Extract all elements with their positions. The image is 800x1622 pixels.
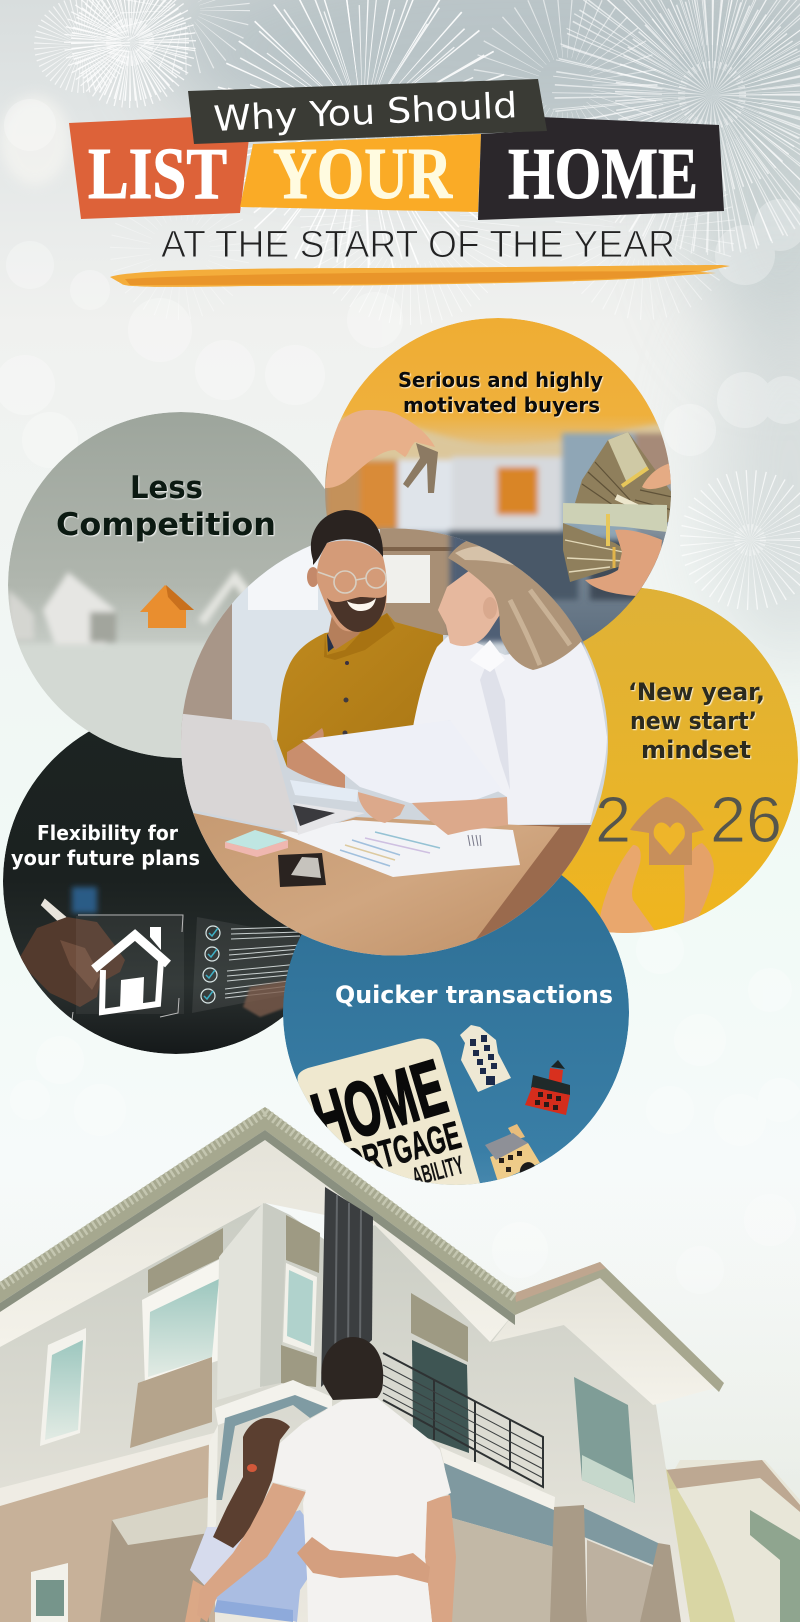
couple bbox=[185, 1337, 456, 1622]
text: serious buyers bbox=[398, 368, 603, 417]
panel: new year new start mindset bbox=[562, 588, 798, 933]
narrow window and siding bbox=[281, 1215, 320, 1387]
word: list: LIST bbox=[88, 133, 227, 214]
legs under table bbox=[470, 825, 592, 942]
woman from behind bbox=[185, 1418, 317, 1622]
text: new year: new start’ bbox=[630, 707, 757, 735]
left windows and siding bbox=[31, 1228, 223, 1622]
porch trim under balcony corner bbox=[207, 1380, 332, 1545]
dark pillar bbox=[321, 1187, 373, 1387]
soffits bbox=[0, 1125, 719, 1405]
icon: orange house bbox=[140, 585, 194, 628]
mortgage card: ABILITY bbox=[409, 1149, 467, 1192]
text: serious buyers: motivated buyers bbox=[403, 393, 600, 417]
right hand on keyboard bbox=[242, 980, 286, 1018]
man's shirt bbox=[277, 613, 443, 767]
cash stacks bbox=[563, 432, 674, 597]
year 2: 2 bbox=[595, 783, 631, 856]
sticky notes bbox=[225, 830, 288, 857]
panel: flexibility for your future plans bbox=[3, 732, 302, 1054]
mini house: red bbox=[525, 1060, 570, 1115]
hand with keys bbox=[325, 410, 438, 493]
phone bbox=[278, 853, 326, 887]
right block window and pillars bbox=[550, 1377, 681, 1622]
banner: why you should: Why You Should bbox=[213, 86, 518, 140]
walls bbox=[0, 1203, 690, 1622]
checklist panel bbox=[192, 917, 312, 1013]
panel: serious buyers bbox=[325, 318, 680, 664]
brush stroke underline bbox=[110, 265, 730, 287]
table bbox=[193, 813, 560, 956]
banner: why you should bbox=[188, 79, 547, 144]
blurred white houses bbox=[8, 570, 258, 645]
panel: less competition bbox=[8, 412, 327, 758]
fireworks bbox=[52, 0, 800, 580]
mortgage card: ORTGAGE bbox=[341, 1114, 465, 1186]
banner: list bbox=[69, 117, 250, 219]
text: less competition: Less bbox=[130, 470, 203, 506]
papers on table bbox=[280, 820, 520, 877]
laptop bbox=[170, 713, 365, 835]
mini house: yellow bbox=[485, 1124, 540, 1182]
glass panel bbox=[72, 915, 184, 1020]
woman bbox=[413, 534, 607, 825]
banner: your bbox=[240, 134, 481, 212]
small chart sheet bbox=[290, 780, 358, 802]
text: quicker transactions: Quicker transactions bbox=[335, 981, 613, 1009]
man's head over the circle edge bbox=[307, 510, 387, 650]
year 26: 26 bbox=[710, 783, 782, 856]
subtitle: AT THE START OF THE YEAR bbox=[161, 224, 675, 266]
banner: home bbox=[478, 117, 724, 220]
text: new year: ‘New year, bbox=[628, 678, 765, 706]
mini house: white bbox=[460, 1025, 511, 1092]
text: less competition: Competition bbox=[56, 507, 276, 543]
word: home: HOME bbox=[508, 133, 698, 214]
central photo: couple at table bbox=[170, 522, 610, 975]
roof bbox=[0, 1107, 724, 1392]
house photo bbox=[0, 1107, 800, 1622]
text: flexibility: your future plans bbox=[11, 846, 200, 870]
balcony bbox=[383, 1293, 658, 1622]
man from behind bbox=[197, 1337, 456, 1622]
woman's hands bbox=[358, 792, 508, 835]
text: new year: mindset bbox=[641, 736, 751, 764]
text: new year bbox=[630, 682, 764, 760]
blurred interior bbox=[325, 418, 680, 600]
word: your: YOUR bbox=[273, 133, 453, 214]
neighbouring house bbox=[662, 1460, 800, 1622]
hand with pen bbox=[20, 900, 125, 1007]
text: less competition bbox=[56, 470, 276, 543]
hands holding wood house bbox=[600, 797, 714, 940]
panel: quicker transactions bbox=[283, 875, 629, 1185]
icon: house bbox=[94, 927, 168, 1012]
text: flexibility bbox=[11, 821, 200, 870]
mortgage card bbox=[298, 1038, 480, 1185]
man's hand bbox=[287, 728, 345, 788]
text: flexibility: Flexibility for bbox=[37, 821, 178, 845]
held document bbox=[302, 720, 502, 803]
mortgage card: HOME bbox=[303, 1044, 455, 1164]
title block bbox=[69, 79, 730, 287]
text: serious buyers: Serious and highly bbox=[398, 368, 603, 392]
room backdrop bbox=[180, 522, 600, 740]
corner column bbox=[217, 1203, 286, 1400]
